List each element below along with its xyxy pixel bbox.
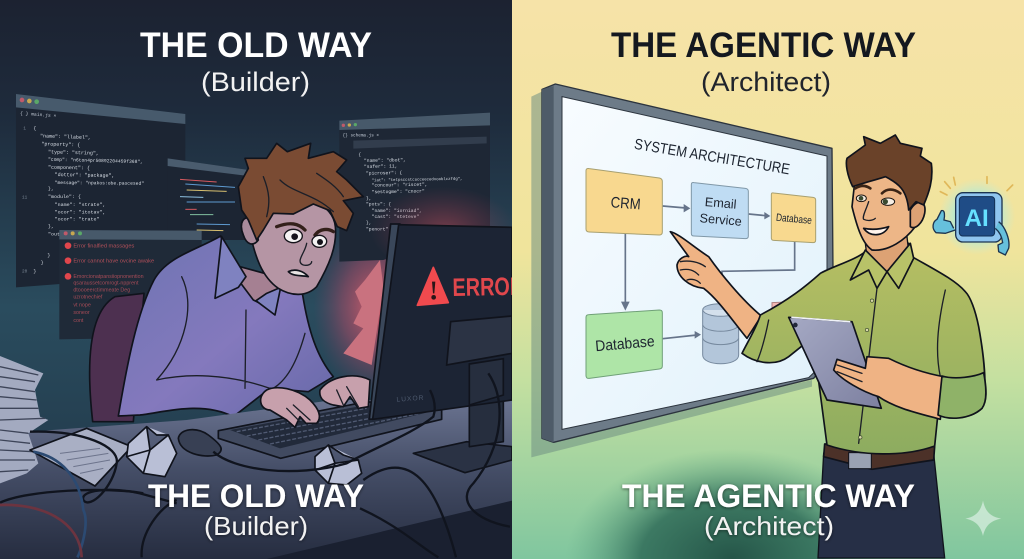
subheading: architect top: (Architect): [701, 67, 831, 97]
node: Database green: Database: [595, 333, 655, 355]
office chair: [90, 293, 144, 422]
code window: right: "safer": 11,: [364, 163, 398, 170]
node: Email Service: Service: [699, 211, 742, 229]
error window: cont: [73, 318, 84, 324]
heading: the old way top: THE OLD WAY: [140, 26, 372, 65]
code window: main.js: "name": "llabel",: [40, 133, 91, 141]
nose: [300, 243, 312, 265]
subheading: architect bottom: (Architect): [704, 511, 834, 541]
code window: right: {: [358, 152, 361, 158]
error window: Error finalfied massages: [73, 244, 134, 250]
tablet: [789, 317, 881, 408]
subheading: builder bottom: (Builder): [204, 511, 308, 541]
error window: uzrotnechief: [73, 295, 103, 301]
eye left: [284, 229, 302, 243]
rays: [940, 177, 1013, 195]
typing hand left: [261, 388, 319, 427]
code window: main.js: 1: [23, 126, 26, 131]
code window: right: "concour": "riscet",: [372, 182, 428, 189]
crumpled paper 2: [315, 445, 362, 485]
error window: soneor: [73, 310, 90, 316]
error label: ERROR: [452, 273, 524, 302]
monitor neck upper: [469, 359, 503, 405]
rolled sleeve: [938, 373, 986, 418]
code window: right: },: [366, 195, 372, 201]
robot screen: [959, 197, 995, 236]
bright office illustration: [531, 84, 1015, 559]
neck: [865, 237, 909, 272]
keyboard: [218, 402, 442, 458]
code window: right: "iat": "tetpsccstcocceecedvooblczfdg",: [372, 177, 463, 183]
eyebrows: [277, 224, 333, 235]
panel: the agentic way (architect): [512, 0, 1024, 559]
shirt details: [757, 288, 945, 443]
node: CRM: CRM: [610, 194, 641, 213]
grimacing mouth: [288, 270, 308, 277]
panel: the old way (builder): [0, 0, 524, 559]
code window: right: "picroser": {: [366, 170, 403, 177]
shirt: [118, 236, 333, 417]
holding hand and forearm: [834, 357, 944, 419]
database cylinder icon: [703, 304, 739, 364]
heading: the agentic way top: THE AGENTIC WAY: [611, 26, 916, 65]
robot arm right: [995, 222, 1009, 255]
code window: right: {} schema.js ×: [343, 134, 379, 139]
shirt folds: [157, 277, 305, 388]
AI label: AI: [965, 205, 989, 232]
shirt buttons: [859, 299, 874, 439]
thumbs up arm: [933, 211, 955, 233]
trousers: [818, 453, 945, 558]
worried developer: [118, 143, 363, 417]
crumpled paper 1: [127, 427, 177, 477]
stack of papers: [0, 356, 48, 483]
code window: main.js: "name": "strate",: [55, 202, 106, 208]
code window: main.js: }: [47, 253, 50, 259]
monitor arm: [447, 316, 512, 365]
smile: [864, 227, 889, 235]
computer mouse: [178, 430, 221, 456]
node: Database green: [586, 310, 662, 378]
pointing forearm and hand: [670, 232, 761, 338]
open document: [30, 428, 132, 486]
error window: [59, 230, 202, 339]
node: Database top: [771, 193, 816, 243]
desk front edge: [267, 501, 512, 559]
node: CRM: [586, 169, 662, 235]
left panel background: [0, 0, 512, 559]
nose: [863, 202, 875, 220]
heading: the old way bottom: [148, 478, 364, 541]
eyes: [856, 195, 895, 205]
code window: centre: [168, 158, 253, 240]
code window: main.js: "dottor": "package",: [55, 172, 115, 179]
red glow over right window: [379, 192, 507, 248]
error window: vt nope: [73, 303, 91, 309]
connector lines: [625, 206, 795, 339]
eye right: [312, 235, 327, 247]
warning triangle: [417, 267, 448, 305]
desk: [0, 400, 512, 559]
heading: the old way bottom: THE OLD WAY: [148, 478, 364, 514]
display frame: [542, 84, 834, 442]
code window: main.js: "message": "npakos:obe.paocesed": [55, 180, 144, 187]
node: Database top: Database: [775, 212, 812, 227]
code window: right: },: [366, 220, 372, 226]
code window: main.js: "out": [48, 231, 63, 237]
wall shadow of display: [531, 90, 812, 457]
code window: main.js: { } main.js ×: [20, 111, 57, 119]
right panel background: [512, 0, 1024, 559]
code window: main.js: "ocor": "itotav",: [55, 209, 106, 215]
hair: [846, 135, 932, 210]
face: [852, 175, 922, 250]
error window: Emorcionatpansiiopnonention: [73, 274, 144, 280]
collar flap right: [256, 287, 281, 315]
collar flap left: [215, 237, 246, 298]
face: [252, 205, 336, 296]
torn pink wall patch: [343, 260, 383, 365]
code window: right: "name": "dbot",: [364, 157, 406, 164]
computer monitor: [369, 224, 524, 473]
node: pink partial: [772, 302, 795, 320]
heading: the old way top: [140, 26, 372, 97]
code window: main.js: "property": {: [41, 141, 80, 148]
code window: main.js: "ocor": "trate": [55, 217, 100, 223]
code window: main.js: }: [41, 260, 44, 266]
node: Email Service: Email: [704, 195, 737, 212]
code window: main.js: }: [33, 269, 36, 275]
tangled cables: [0, 373, 510, 557]
monitor neck: [468, 402, 504, 448]
wall display: [542, 84, 834, 442]
red glow on the wall: [318, 244, 386, 389]
typing hand right: [320, 376, 370, 408]
sparkle watermark: [965, 501, 1001, 536]
code window: main.js: {: [33, 125, 36, 131]
code window: right: "cast": "steteve": [372, 214, 419, 220]
connector arrowheads: [621, 204, 770, 339]
architect presenting: [670, 135, 1015, 558]
code window: right: "pots": {: [366, 201, 391, 207]
AI helper robot: [933, 177, 1015, 255]
eyebrows: [855, 186, 900, 193]
monitor back panel: [373, 225, 512, 419]
brand mark: LUXOR: [396, 395, 425, 404]
spiky hair: [238, 143, 363, 240]
display screen: [562, 97, 827, 429]
heading: the agentic way bottom: [622, 478, 915, 541]
code window: right: "name": "iorniad",: [372, 208, 422, 214]
dark office illustration: [0, 94, 524, 559]
glow: [939, 178, 1015, 255]
error window: Error cannot have ovcine awake: [73, 259, 154, 265]
code window: main.js: },: [48, 186, 54, 192]
monitor base: [413, 442, 512, 473]
heading: the agentic way bottom: THE AGENTIC WAY: [622, 478, 915, 514]
subheading: builder top: (Builder): [201, 67, 310, 97]
node: Email Service: [691, 183, 748, 239]
screen title: SYSTEM ARCHITECTURE: [633, 136, 791, 178]
belt: [824, 444, 935, 469]
code window: main.js: 20: [22, 270, 28, 275]
heading: the agentic way top: [611, 26, 916, 97]
code window: main.js: "component": {: [48, 165, 90, 171]
code window: main.js: "module": {: [48, 194, 81, 200]
code window: main.js: 11: [22, 195, 28, 200]
code window: main.js: "type": "string",: [48, 149, 99, 157]
code window: main.js: [16, 94, 185, 287]
robot body: [956, 193, 1002, 242]
hair strands: [263, 173, 343, 217]
ear: [910, 202, 925, 228]
error window: qsaraussetcomrogt-npprent: [73, 281, 139, 287]
ear: [241, 218, 258, 244]
code window: right: [339, 113, 490, 262]
collar: [850, 243, 914, 288]
dark vignette behind bottom title: [565, 449, 899, 559]
code window: main.js: "comp": "n6ton4pr50892204459f368",: [48, 157, 143, 165]
monitor side: [369, 224, 400, 419]
code window: right: "penort": [366, 227, 389, 233]
neck: [240, 266, 277, 300]
code window: right: "sestogme": "cnocr": [372, 188, 425, 195]
shirt: [742, 243, 985, 454]
code window: main.js: },: [48, 223, 54, 229]
error window: dtoooeerctimmeate Deg: [73, 287, 130, 293]
